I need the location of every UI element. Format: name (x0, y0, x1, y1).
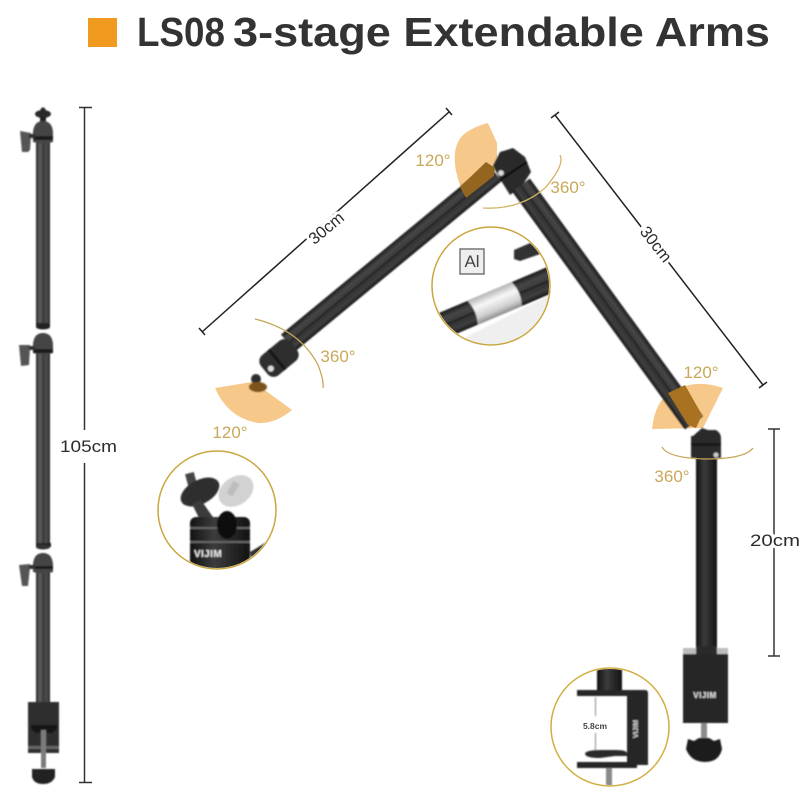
pole clamp (28, 702, 59, 784)
wedge: 120 degree top (455, 123, 497, 188)
title (88, 9, 770, 55)
base column (696, 458, 717, 650)
dimension: 30cm right arm: 30cm (636, 223, 675, 266)
ball head at end of left arm (249, 374, 267, 392)
second joint (19, 323, 53, 366)
inset: ball head (158, 451, 276, 575)
left arm lower joint (256, 336, 302, 380)
top ball head (20, 108, 53, 152)
wedge: 120 degree lower right (652, 384, 723, 429)
folded arm column (19, 108, 59, 784)
articulated arm (249, 148, 728, 762)
rotation ellipse: elbow (483, 155, 561, 208)
dimension: 20cm: 20cm (750, 532, 800, 550)
right arm tube (512, 179, 703, 429)
title marker square (88, 18, 117, 47)
rotation ellipse: left arm (255, 319, 323, 388)
elbow joint (493, 148, 531, 195)
label: 120 top: 120° (415, 151, 451, 170)
rotation ellipse: base (662, 447, 753, 459)
lower base joint (691, 428, 721, 458)
base clamp: VIJIM (693, 691, 717, 700)
label: 360 elbow: 360° (550, 178, 586, 197)
dimension: 30cm left arm: 30cm (305, 209, 348, 248)
third joint (19, 543, 53, 586)
title text: 3-stage Extendable Arms (233, 9, 770, 55)
dimension: 105cm: 105cm (60, 438, 117, 456)
dimension: 20cm (750, 429, 800, 656)
clamp opening label: 5.8cm (583, 721, 607, 731)
inset: clamp opening (551, 665, 669, 790)
dimension: 30cm left arm (199, 108, 452, 335)
label: 360 left: 360° (320, 347, 356, 366)
angle labels (212, 151, 719, 486)
pole tube middle (36, 350, 50, 546)
label: 120 left: 120° (212, 423, 248, 442)
inset: aluminium tube (431, 226, 551, 346)
inset: ball head: VIJIM (194, 549, 222, 560)
title text: LS08 (137, 9, 225, 55)
wedge: 120 degree lower left (215, 382, 292, 423)
dimension: 30cm right arm (551, 112, 767, 388)
aluminium badge: Al (464, 252, 480, 271)
dimension: 105cm (60, 107, 117, 782)
label: 120 right: 120° (683, 363, 719, 382)
wedge overlays on arm (460, 162, 702, 428)
inset: clamp opening: VIJIM (633, 720, 640, 738)
label: 360 base: 360° (654, 467, 690, 486)
left arm tube (281, 164, 502, 351)
base clamp (683, 646, 728, 762)
pole tube lower (36, 570, 50, 704)
pole tube upper (36, 140, 50, 326)
